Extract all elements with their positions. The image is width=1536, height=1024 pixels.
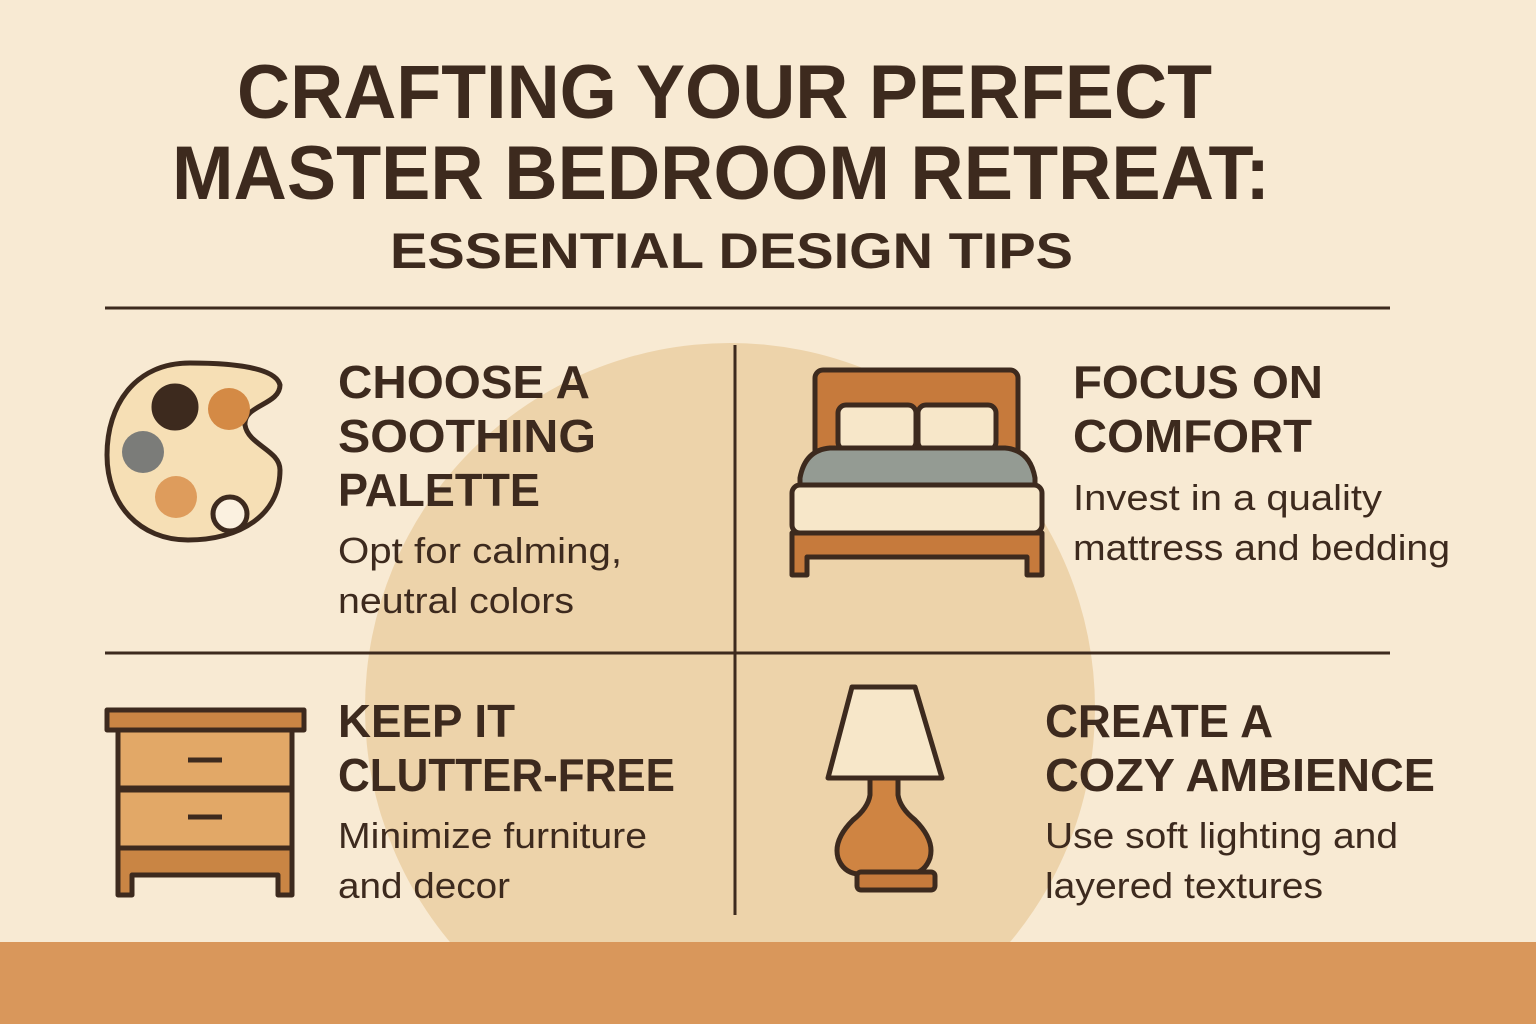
- text: clutter body: and decor: [338, 865, 510, 906]
- heading: choose a soothing palette: SOOTHING: [338, 410, 596, 462]
- text: palette body: neutral colors: [338, 580, 574, 621]
- heading: keep it clutter-free: CLUTTER-FREE: [338, 749, 675, 801]
- heading: keep it clutter-free: [338, 695, 675, 801]
- title: CRAFTING YOUR PERFECT: [237, 50, 1212, 135]
- heading: choose a soothing palette: PALETTE: [338, 464, 540, 516]
- text: clutter body: Minimize furniture: [338, 815, 647, 856]
- title: MASTER BEDROOM RETREAT:: [172, 131, 1270, 216]
- title: [172, 50, 1270, 216]
- heading: keep it clutter-free: KEEP IT: [338, 695, 515, 747]
- bottom band: [0, 942, 1536, 1024]
- text: comfort body: Invest in a quality: [1073, 477, 1382, 518]
- background circle: [365, 343, 1095, 1024]
- text: clutter body: [338, 815, 647, 906]
- text: palette body: Opt for calming,: [338, 530, 622, 571]
- panel: soothing palette: [107, 356, 622, 621]
- subtitle: ESSENTIAL DESIGN TIPS: [390, 223, 1073, 279]
- heading: focus on comfort: FOCUS ON: [1073, 356, 1323, 408]
- text: palette body: [338, 530, 622, 621]
- heading: choose a soothing palette: CHOOSE A: [338, 356, 590, 408]
- heading: focus on comfort: COMFORT: [1073, 410, 1312, 462]
- heading: create a cozy ambience: COZY AMBIENCE: [1045, 749, 1435, 801]
- icon: nightstand: [107, 710, 304, 895]
- text: comfort body: [1073, 477, 1450, 568]
- text: ambience body: [1045, 815, 1398, 906]
- heading: create a cozy ambience: [1045, 695, 1435, 801]
- icon: bed: [792, 370, 1042, 575]
- icon: lamp: [828, 687, 942, 890]
- panel: cozy ambience: [828, 687, 1435, 906]
- icon: palette: [107, 363, 280, 540]
- heading: create a cozy ambience: CREATE A: [1045, 695, 1273, 747]
- heading: choose a soothing palette: [338, 356, 596, 516]
- heading: focus on comfort: [1073, 356, 1323, 462]
- text: comfort body: mattress and bedding: [1073, 527, 1450, 568]
- panel: comfort: [792, 356, 1450, 575]
- text: ambience body: Use soft lighting and: [1045, 815, 1398, 856]
- panel: clutter-free: [107, 695, 675, 906]
- text: ambience body: layered textures: [1045, 865, 1323, 906]
